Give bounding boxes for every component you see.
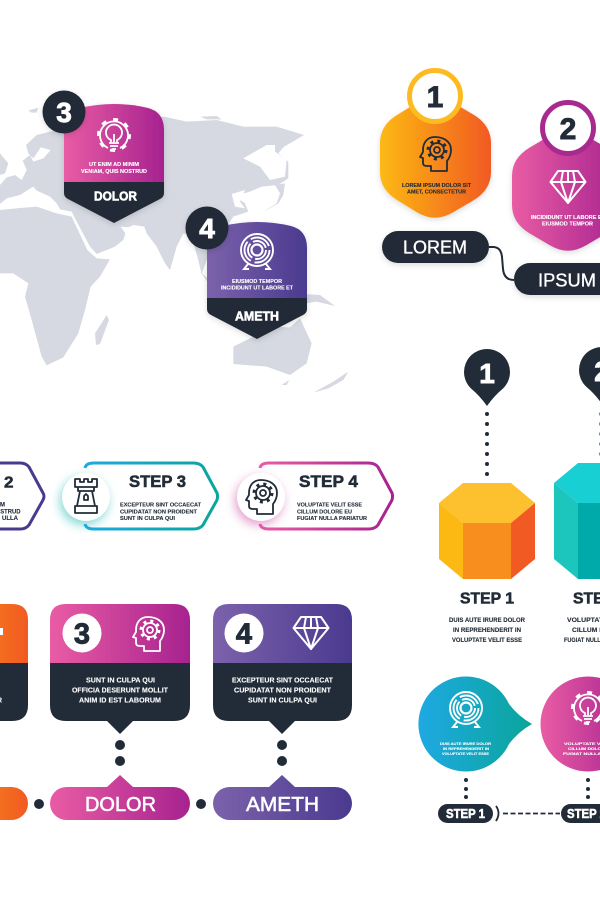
dotted line: bubble 2 xyxy=(586,778,590,799)
icon: diamond xyxy=(550,171,586,203)
text: step 1 description: IN REPREHENDERIT IN xyxy=(453,628,521,634)
text: hexagon 1 description: LOREM IPSUM DOLOR SIT xyxy=(402,183,471,189)
text: blue bubble description: VOLUPTATE VELIT ESSE xyxy=(442,751,489,756)
text: step 1 description: DUIS AUTE IRURE DOLOR xyxy=(449,618,526,624)
connector dots: card 4 xyxy=(277,740,287,766)
pin: number 1 xyxy=(464,349,510,406)
text: step 3 description: SUNT IN CULPA QUI xyxy=(120,516,175,522)
badge: ring 1 xyxy=(410,70,460,122)
dotted line: pin 1 xyxy=(485,412,489,476)
text: blue bubble description xyxy=(440,741,491,756)
text: step 1 description xyxy=(449,618,526,644)
pill: STEP 1 xyxy=(438,804,493,823)
badge: number 4: 4 xyxy=(236,618,252,650)
text: step 4 description: VOLUPTATE VELIT ESSE xyxy=(297,502,362,508)
badge: number 3: 3 xyxy=(74,618,90,650)
icon: maze xyxy=(450,692,482,727)
pill: DOLOR xyxy=(50,775,190,820)
text: card 4 description xyxy=(232,678,334,704)
pill: IPSUM: IPSUM xyxy=(538,270,596,290)
pill: LOREM: LOREM xyxy=(403,238,467,258)
text: hexagon 2 description xyxy=(531,215,600,228)
pill: STEP 1: STEP 1 xyxy=(446,807,485,821)
panel: step tag 2: M xyxy=(0,502,5,508)
pill: AMETH: AMETH xyxy=(246,794,319,816)
heading: STEP 4: STEP 4 xyxy=(299,473,359,491)
panel: step tag 4 xyxy=(235,463,392,529)
pin: number 2 xyxy=(579,347,600,404)
text: step 2 description xyxy=(564,618,600,644)
bubble: magenta step 2 xyxy=(540,676,600,772)
heading: STEP 1: STEP 1 xyxy=(460,590,514,608)
panel: map marker 4 AMETH xyxy=(186,206,307,339)
text: step 3 description: EXCEPTEUR SINT OCCAECAT xyxy=(120,502,201,508)
icon: gear bulb xyxy=(98,120,130,150)
text: step 4 description: FUGIAT NULLA PARIATUR xyxy=(297,516,368,522)
text: hexagon 1 description xyxy=(402,183,471,196)
heading: STEP 3: STEP 3 xyxy=(129,473,186,491)
text: hexagon 2 description: EIUSMOD TEMPOR xyxy=(542,222,593,228)
dotted line: bubble 1 xyxy=(464,778,468,799)
pill: LOREM xyxy=(382,231,489,263)
badge: ring 2 xyxy=(542,102,594,154)
text: card 3 description xyxy=(72,678,169,704)
text: blue bubble description: DUIS AUTE IRURE DOLOR xyxy=(440,741,491,746)
text: marker 4 description: EIUSMOD TEMPOR xyxy=(232,279,282,285)
panel: step tag 2 xyxy=(0,463,44,529)
text: hexagon 2 description: INCIDIDUNT UT LABORE ET xyxy=(531,215,600,221)
text: blue bubble description: IN REPREHENDERIT IN xyxy=(443,746,489,751)
pill: IPSUM xyxy=(514,263,600,295)
text: marker 3 description xyxy=(81,162,147,175)
connector: dashed line xyxy=(496,806,560,821)
connector: lorem to ipsum xyxy=(489,247,514,280)
text: marker 3 description: VENIAM, QUIS NOSTRUD xyxy=(81,169,147,175)
icon: diamond xyxy=(294,617,328,649)
icon: maze xyxy=(241,234,273,269)
text: marker 4 description: INCIDIDUNT UT LABORE ET xyxy=(221,286,293,292)
panel: map marker 3 DOLOR xyxy=(42,90,164,223)
pin: number 1: 1 xyxy=(479,358,495,389)
label: DOLOR: DOLOR xyxy=(94,190,137,204)
badge: number 4: 4 xyxy=(199,213,215,244)
label: AMETH: AMETH xyxy=(235,310,279,324)
text: card 3 description: OFFICIA DESERUNT MOLLIT xyxy=(72,688,169,694)
world map xyxy=(0,108,348,393)
text: magenta bubble description: VOLUPTATE VELIT xyxy=(564,741,600,746)
icon: head gear xyxy=(133,617,164,651)
icon: tower badge xyxy=(62,473,110,521)
panel: step tag 2: 2 xyxy=(4,474,14,492)
icon: head badge xyxy=(237,473,285,521)
text: magenta bubble description xyxy=(563,741,600,756)
text: card 4 description: EXCEPTEUR SINT OCCAECAT xyxy=(232,678,334,684)
text: card 3 description: ANIM ID EST LABORUM xyxy=(79,698,161,704)
text: card 4 description: SUNT IN CULPA QUI xyxy=(248,698,317,704)
pill: DOLOR: DOLOR xyxy=(85,794,156,816)
text: step 4 description: CILLUM DOLORE EU xyxy=(297,510,352,516)
text: step 3 description xyxy=(120,502,201,522)
panel: card 2 partial xyxy=(0,604,28,721)
text: step 1 description: VOLUPTATE VELIT ESSE xyxy=(452,638,522,644)
connector dots: card 3 xyxy=(115,740,125,766)
panel: hexagon 1 xyxy=(380,70,491,218)
panel: hexagon 2 xyxy=(512,102,600,251)
prism: teal xyxy=(554,463,600,579)
pill: STEP 2 xyxy=(561,804,600,823)
pill: AMETH xyxy=(213,775,352,820)
text: card 4 description: CUPIDATAT NON PROIDENT xyxy=(234,688,332,694)
panel: step tag 2: ULLA xyxy=(2,516,19,522)
panel: card 3 xyxy=(50,604,190,734)
dotted line: pin 2 xyxy=(599,412,600,456)
badge: ring 2: 2 xyxy=(560,113,576,146)
pill: partial orange xyxy=(0,787,28,820)
icon: gear bulb xyxy=(572,692,600,724)
bubble: blue step 1 xyxy=(418,676,532,771)
prism: orange xyxy=(439,483,535,579)
text: marker 4 description xyxy=(221,279,293,292)
dot: between pills right xyxy=(196,799,206,809)
text: step 3 description: CUPIDATAT NON PROIDENT xyxy=(120,510,197,516)
text: hexagon 1 description: AMET, CONSECTETUR xyxy=(407,190,466,196)
text: step 4 description xyxy=(297,502,368,522)
text: marker 3 description: UT ENIM AD MINIM xyxy=(89,162,139,168)
badge: ring 1: 1 xyxy=(427,81,443,114)
icon: head gear xyxy=(420,137,451,171)
dot: between pills left xyxy=(34,799,44,809)
text: card 3 description: SUNT IN CULPA QUI xyxy=(86,678,155,684)
badge: number 3: 3 xyxy=(56,97,72,128)
panel: card 4 xyxy=(213,604,352,734)
panel: step tag 3 xyxy=(60,463,218,529)
